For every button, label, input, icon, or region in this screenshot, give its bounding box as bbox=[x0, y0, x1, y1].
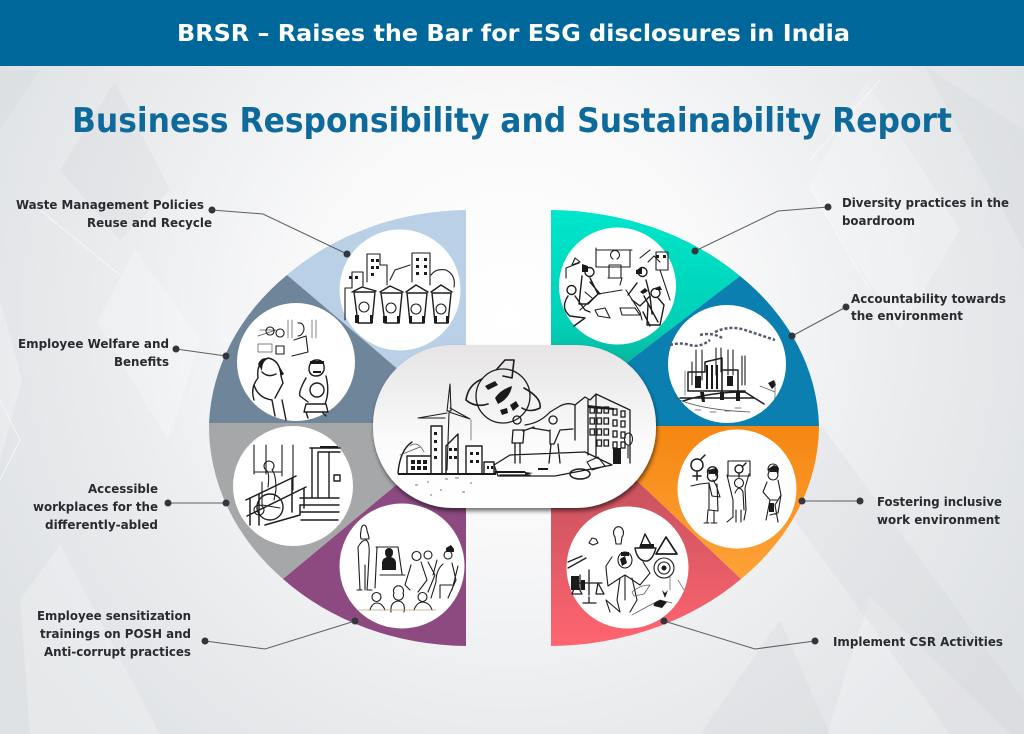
callout: sensitization trainings: trainings on POSH and bbox=[40, 626, 191, 641]
illustration circle: factory bbox=[668, 305, 786, 423]
callout: employee welfare bbox=[18, 336, 230, 369]
segment: accessible workplaces bbox=[209, 423, 466, 579]
illustration circle: recycling bins and city bbox=[340, 230, 460, 350]
callout: accessible workplaces: Accessible bbox=[88, 481, 158, 496]
header bar bbox=[0, 0, 1024, 66]
illustration circle: gender equality people bbox=[678, 430, 796, 548]
callout: inclusive work: Fostering inclusive bbox=[877, 494, 1002, 509]
callout: waste management bbox=[16, 197, 350, 258]
segment: inclusive work environment bbox=[600, 426, 819, 579]
callout: employee welfare: Employee Welfare and bbox=[18, 336, 169, 351]
callout: environment bbox=[788, 291, 1006, 340]
segment: CSR activities bbox=[551, 440, 741, 646]
illustration circle: training session bbox=[340, 504, 464, 628]
illustration circle: family and workplace bbox=[237, 303, 355, 421]
callout: inclusive work: work environment bbox=[877, 512, 1000, 527]
central illustration pill bbox=[373, 345, 656, 508]
icon: globe with leaf bbox=[466, 360, 540, 423]
segment: employee welfare bbox=[209, 275, 466, 427]
people on platform and pencil bbox=[494, 416, 612, 479]
callout: diversity: boardroom bbox=[842, 213, 915, 228]
city skyline bbox=[398, 420, 496, 495]
callout: diversity: Diversity practices in the bbox=[842, 195, 1009, 210]
main heading: Business Responsibility and Sustainability Report bbox=[72, 101, 952, 140]
segment: environmental accountability bbox=[551, 276, 819, 426]
segment: diversity in the boardroom bbox=[551, 210, 740, 421]
illustration circle: wheelchair ramp bbox=[233, 426, 353, 546]
callout: CSR: Implement CSR Activities bbox=[833, 634, 1003, 649]
illustration circle: boardroom meeting bbox=[559, 228, 676, 344]
callout: environment: the environment bbox=[851, 308, 963, 323]
callout: waste management: Reuse and Recycle bbox=[87, 215, 212, 230]
office building with rising arrow bbox=[525, 394, 632, 464]
callout: accessible workplaces bbox=[33, 481, 230, 532]
callout: waste management: Waste Management Policies bbox=[16, 197, 204, 212]
segment: sensitization trainings bbox=[283, 427, 466, 646]
callout: sensitization trainings: Employee sensitization bbox=[37, 608, 191, 623]
callout: environment: Accountability towards bbox=[851, 291, 1006, 306]
segment: waste management bbox=[287, 210, 466, 427]
callout: sensitization trainings bbox=[37, 608, 358, 659]
illustration circle: CSR businessman bbox=[566, 506, 688, 628]
header title: BRSR – Raises the Bar for ESG disclosures in India bbox=[177, 19, 850, 47]
callout: accessible workplaces: workplaces for the bbox=[33, 499, 158, 514]
callout: inclusive work bbox=[798, 494, 1002, 527]
callout: accessible workplaces: differently-abled bbox=[45, 517, 158, 532]
icon: wind turbine bbox=[418, 384, 470, 470]
callout: CSR bbox=[660, 618, 1003, 649]
callout: employee welfare: Benefits bbox=[114, 354, 169, 369]
callout: sensitization trainings: Anti-corrupt practices bbox=[44, 644, 191, 659]
callout: diversity bbox=[692, 195, 1009, 254]
